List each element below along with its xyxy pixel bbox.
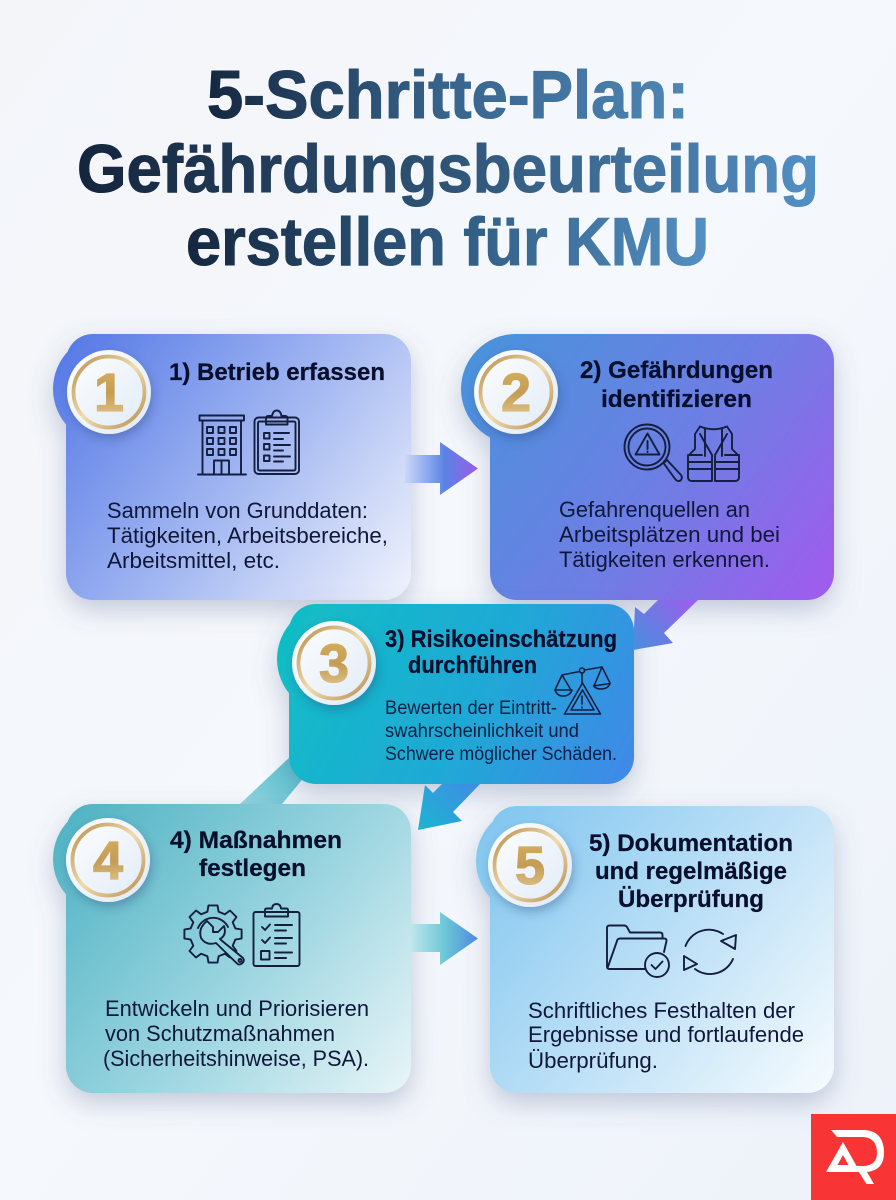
panel: step 5: [476, 806, 834, 1093]
arrow: step 4 to step 5: [411, 912, 478, 965]
badge 5: [488, 823, 572, 907]
text 4: [103, 996, 369, 1071]
text 5: Schriftliches Festhalten der: [528, 998, 796, 1023]
text 4: (Sicherheitshinweise, PSA).: [103, 1046, 369, 1071]
icon: folder with check: [607, 926, 669, 977]
panel: step 2: [461, 334, 834, 600]
icon: building: [198, 416, 246, 474]
icon: magnifier with warning: [624, 424, 682, 481]
text 3: swahrscheinlichkeit und: [385, 721, 579, 742]
heading 4: [170, 827, 342, 882]
text 2: Tätigkeiten erkennen.: [559, 547, 770, 572]
title: 5-Schritte-Plan:: [207, 57, 689, 133]
panel: step 4: [53, 804, 411, 1093]
icon: checklist: [254, 904, 300, 966]
text 3: Schwere möglicher Schäden.: [385, 744, 617, 765]
text 1: Sammeln von Grunddaten:: [107, 498, 368, 523]
badge 1: [67, 350, 151, 434]
badge 2: [474, 350, 558, 434]
heading 4: festlegen: [199, 855, 306, 882]
text 1: Arbeitsmittel, etc.: [107, 548, 280, 573]
arrow: step 1 to step 2: [405, 442, 478, 495]
arrow: step 3 down to step 5 area: [418, 784, 480, 830]
title: [77, 57, 819, 280]
icon: gear with wrench: [184, 905, 244, 964]
heading 4: 4) Maßnahmen: [170, 827, 342, 854]
heading 1: 1) Betrieb erfassen: [169, 359, 385, 386]
title: erstellen für KMU: [186, 204, 709, 280]
icon: scales with warning: [555, 667, 610, 714]
heading 2: 2) Gefährdungen: [580, 357, 773, 384]
badge 3: [292, 621, 376, 705]
badge 5: 5: [515, 836, 545, 896]
text 1: [107, 498, 388, 573]
badge 1: 1: [94, 363, 124, 423]
heading 5: 5) Dokumentation: [589, 830, 793, 857]
badge 4: 4: [93, 831, 123, 891]
icon: clipboard: [254, 410, 299, 474]
logo: [811, 1114, 896, 1200]
text 1: Tätigkeiten, Arbeitsbereiche,: [107, 523, 388, 548]
badge 2: 2: [501, 363, 531, 423]
heading 3: [385, 626, 617, 679]
text 2: Arbeitsplätzen und bei: [559, 522, 780, 547]
arrow: step 2 to step 3: [633, 600, 698, 650]
text 2: [559, 497, 780, 572]
text 5: [528, 998, 804, 1073]
text 4: von Schutzmaßnahmen: [105, 1021, 335, 1046]
heading 5: und regelmäßige: [595, 858, 787, 885]
icon: safety vest: [688, 426, 739, 481]
text 5: Überprüfung.: [528, 1048, 658, 1073]
text 3: Bewerten der Eintritt-: [385, 698, 557, 719]
heading 2: identifizieren: [601, 386, 752, 413]
text 5: Ergebnisse und fortlaufende: [528, 1022, 804, 1047]
heading 5: Überprüfung: [618, 886, 764, 913]
badge 3: 3: [319, 634, 349, 694]
badge 4: [66, 818, 150, 902]
heading 2: [580, 357, 773, 413]
heading 3: 3) Risikoeinschätzung: [385, 626, 617, 653]
heading 5: [589, 830, 793, 913]
title: Gefährdungsbeurteilung: [77, 131, 819, 207]
icon: refresh arrows: [684, 930, 736, 974]
panel: step 1: [53, 334, 411, 600]
panel: step 3: [277, 604, 634, 784]
arrow: step 3 to step 4: [240, 755, 306, 804]
text 3: [385, 698, 617, 765]
text 4: Entwickeln und Priorisieren: [105, 996, 369, 1021]
heading 3: durchführen: [408, 652, 537, 679]
text 2: Gefahrenquellen an: [559, 497, 750, 522]
